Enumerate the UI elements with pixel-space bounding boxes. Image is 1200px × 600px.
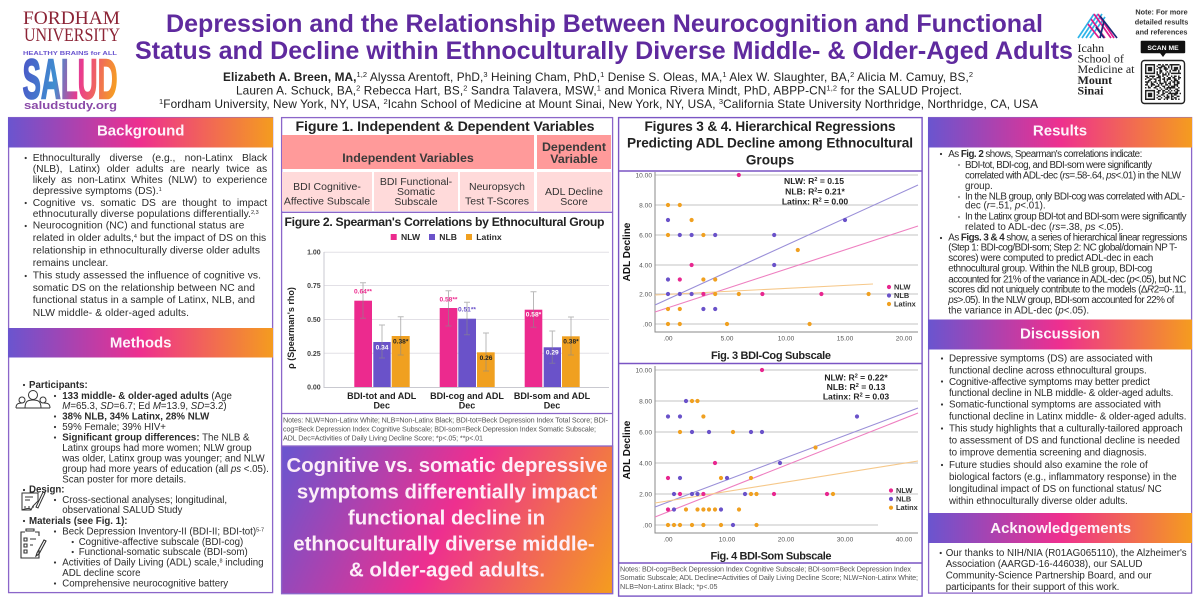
- authors and affiliations: 2: [383, 97, 388, 106]
- text block: background: somatic DS on the relationship between NC and: [33, 283, 255, 294]
- authors and affiliations: 1,2: [826, 84, 837, 92]
- authors and affiliations: California State University Northridge, Northridge, CA, USA: [723, 97, 1038, 111]
- authors and affiliations: 1,2: [356, 70, 367, 79]
- text block: background: relationship in ethnoculturally diverse older adults: [33, 246, 260, 256]
- figure 1: variables table: Affective Subscale: [284, 196, 370, 208]
- callout: key finding: functional decline in: [348, 508, 545, 530]
- annotation: R squared figure 3: 2: [814, 188, 817, 194]
- authors and affiliations: Elizabeth A. Breen, MA,: [223, 70, 356, 84]
- text block: discussion: Cognitive-affective symptoms may better predict: [949, 377, 1150, 388]
- text block: materials: Beck Depression Inventory-II (BDI-II; BDI-tot): [62, 526, 256, 538]
- text block: acknowledgements: Association (AARGD-16-446038), our SALUD: [946, 559, 1142, 570]
- annotation: R squared figure 3: 2: [819, 198, 822, 204]
- notes: figures 3 and 4: NLB=Non-Latinx Black; *p<.05: [620, 582, 718, 591]
- figure 1: variables table: Somatic: [397, 186, 435, 198]
- chart: figure 4 scatter plot: 2.00: [639, 492, 652, 498]
- authors and affiliations: 1: [159, 97, 163, 106]
- heading: methods: [8, 328, 273, 358]
- text block: results: related to ADL-dec (rs=.38, ps <.05).: [965, 222, 1124, 233]
- figure 2: bar chart: 0.25: [307, 351, 321, 358]
- text block: participants: Latinx groups had more women; NLW group: [62, 443, 252, 454]
- chart: figure 3 scatter plot: 5.00: [721, 336, 734, 342]
- text block: results: As Fig. 2 shows, Spearman's correlations indicate:: [948, 149, 1142, 160]
- chart: figure 3 scatter plot: 10.00: [635, 172, 652, 180]
- text block: results: accounted for 21% of the variance in ADL-dec (p<.05), but NC: [948, 274, 1186, 285]
- text block: acknowledgements: Our thanks to NIH/NIA (R01AG065110), the Alzheimer's: [946, 548, 1187, 559]
- chart: figure 3 scatter plot: 15.00: [837, 336, 854, 342]
- figure 1: variables table: BDI Functional-: [380, 176, 453, 188]
- authors and affiliations: 1: [600, 70, 604, 79]
- text block: materials: including: [223, 558, 264, 568]
- chart: figure 4 scatter plot: 10.00: [719, 536, 736, 544]
- chart: figure 4 scatter plot: 10.00: [635, 368, 652, 374]
- text: SALUD: [22, 48, 118, 112]
- text block: background: likely as non-Latinx Whites (NLW) to experience: [33, 175, 267, 186]
- figure 2: bar chart: [284, 215, 609, 410]
- text block: background: [26, 153, 268, 319]
- text block: discussion: functional decline in Latinx middle- & older-aged adults.: [949, 412, 1186, 422]
- text block: results: group.: [965, 181, 993, 192]
- logo: Icahn School of Medicine at Mount Sinai: Icahn: [1078, 41, 1104, 55]
- text block: acknowledgements: Community-Science Partnership Board, and our: [946, 570, 1152, 582]
- text block: participants: Participants:: [29, 380, 88, 391]
- notes: figures 3 and 4: [620, 564, 918, 591]
- text block: background: Cognitive vs. somatic DS are thought to impact: [33, 198, 267, 209]
- authors and affiliations: for the SALUD Project.: [837, 84, 962, 98]
- figure 1: variables table: BDI Cognitive-: [293, 181, 361, 193]
- chart: figure 3 scatter plot: 8.00: [639, 202, 652, 210]
- chart: figure 3 scatter plot: 4.00: [639, 262, 652, 270]
- chart: figure 4 scatter plot: .00: [663, 536, 673, 544]
- callout: key finding: [282, 446, 613, 594]
- chart: figure 4 scatter plot: 6.00: [639, 430, 652, 436]
- logo: Icahn School of Medicine at Mount Sinai: Sinai: [1078, 84, 1104, 98]
- heading: figures 3 and 4: [627, 119, 913, 168]
- figure 2: bar chart: 0.58**: [440, 296, 458, 304]
- figure 2: bar chart: 0.34: [376, 344, 389, 352]
- text block: discussion: Somatic-functional symptoms are associated with: [949, 400, 1161, 410]
- chart: figure 3 scatter plot: ADL Decline: [622, 222, 633, 281]
- text block: background: depressive symptoms (DS).: [33, 186, 159, 197]
- text block: background: Neurocognition (NC) and functional status are: [33, 220, 245, 232]
- heading: results: Results: [1033, 122, 1087, 140]
- figure 1: variables table: Variable: [550, 152, 598, 166]
- figure 1: variables table: Neuropsych: [469, 181, 525, 193]
- legend: figure 3: NLB: [894, 291, 909, 300]
- authors and affiliations: and Monica Rivera Mindt, PhD, ABPP-CN: [601, 84, 826, 98]
- panel: figures 3 and 4: [619, 118, 922, 596]
- chart: figure 3 scatter plot: .00: [663, 336, 673, 342]
- heading: acknowledgements: [928, 513, 1192, 543]
- text block: results: the variance in ADL-dec (p<.05).: [948, 305, 1089, 316]
- heading: figures 3 and 4: Predicting ADL Decline among Ethnocultural: [627, 136, 913, 150]
- figure 2: bar chart: Dec: [544, 400, 560, 410]
- annotation: R squared figure 3: = 0.15: [817, 176, 844, 186]
- text block: background: 1: [159, 187, 162, 193]
- chart: figure 4 scatter plot: Fig. 4 BDI-Som Subscale: [710, 550, 832, 562]
- text block: materials: Comprehensive neurocognitive battery: [62, 578, 228, 590]
- text block: participants: M=65.3, SD=6.7; Ed M=13.9, SD=3.2): [62, 401, 227, 412]
- logo: SALUD: saludstudy.org: [24, 100, 117, 112]
- text block: results: In the Latinx group BDI-tot and BDI-som were significantly: [965, 212, 1187, 223]
- notes: figure 2: Notes: NLW=Non-Latinx White; NLB=Non-Latinx Black; BDI-tot=Beck Depression Index Total Score; BDI-: [283, 416, 609, 424]
- text block: participants: Scan poster for more details.: [62, 474, 186, 486]
- chart: figure 4 scatter plot: [622, 366, 919, 562]
- authors and affiliations: Heining Cham, PhD,: [488, 70, 600, 84]
- chart: figure 3 scatter plot: 10.00: [778, 336, 795, 342]
- text block: materials: Cognitive-affective subscale (BDI-cog): [79, 537, 243, 548]
- authors and affiliations: Alex W. Slaughter, BA,: [727, 70, 850, 84]
- text block: background: 2,3: [251, 210, 259, 216]
- annotation: R squared figure 4: 2: [855, 374, 858, 380]
- panel: results, discussion, acknowledgements: [928, 118, 1192, 593]
- notes: figure 2: [283, 416, 609, 442]
- text block: results: As Figs. 3 & 4 show, a series of hierarchical linear regressions: [948, 233, 1187, 244]
- heading: methods: Methods: [110, 334, 172, 352]
- figure 2: bar chart: BDI-cog and ADL: [430, 391, 504, 401]
- chart: figure 4 scatter plot: 8.00: [639, 398, 652, 406]
- text block: background: remains unclear.: [33, 258, 108, 269]
- text block: discussion: within ethnoculturally diverse older adults.: [948, 496, 1128, 507]
- text block: materials: 8: [220, 558, 223, 564]
- logo: Icahn School of Medicine at Mount Sinai: [1078, 14, 1135, 98]
- figure 2: bar chart: BDI-som and ADL: [514, 391, 591, 401]
- logo: Fordham University: FORDHAM: [23, 8, 120, 29]
- text block: discussion: [942, 354, 1186, 507]
- text block: participants: 59% Female; 39% HIV+: [62, 422, 166, 433]
- callout: key finding: & older-aged adults.: [349, 560, 545, 582]
- callout: key finding: ethnoculturally diverse middle-: [293, 534, 595, 556]
- figure 2: bar chart: 0.50: [307, 317, 321, 324]
- annotation: R squared figure 3: 2: [814, 177, 817, 183]
- chart legend: [391, 232, 502, 242]
- text block: results: ps>.05). In the NLW group, BDI-som accounted for 22% of: [947, 295, 1175, 306]
- annotation: R squared figure 4: Latinx: R: [823, 392, 860, 402]
- authors and affiliations: Rebecca Hart, BS,: [360, 84, 463, 98]
- text block: discussion: to improve dementia screening and diagnosis.: [949, 448, 1147, 458]
- authors and affiliations: 2: [850, 70, 854, 79]
- figure 2: bar chart: 0.64**: [354, 288, 372, 296]
- chart: figure 4 scatter plot: 40.00: [896, 536, 913, 544]
- authors and affiliations: 1: [722, 70, 727, 79]
- annotation: R squared figure 3: NLW: R: [784, 176, 814, 186]
- text block: results: scores did not uniquely contribute to the models (ΔR2=0-.11,: [948, 285, 1186, 296]
- figure 2: bar chart: 0.38*: [393, 338, 409, 346]
- logo: Fordham University: [23, 8, 120, 46]
- chart: figure 4 scatter plot: 20.00: [778, 536, 795, 544]
- text block: design: Cross-sectional analyses; longitudinal,: [62, 495, 227, 506]
- text block: results: BDI-tot, BDI-cog, and BDI-som were significantly: [965, 160, 1152, 171]
- logo: Icahn School of Medicine at Mount Sinai: School of: [1078, 52, 1124, 66]
- annotation: R squared figure 4: NLW: R: [824, 372, 855, 382]
- notes: figures 3 and 4: Notes: BDI-cog=Beck Depression Index Cognitive Subscale; BDI-som=Beck Depression Index: [620, 564, 911, 574]
- figure 1: variables table: Score: [560, 196, 588, 208]
- text block: participants: 133 middle- & older-aged adults (Age: [62, 391, 232, 402]
- chart: figure 3 scatter plot: [622, 172, 918, 362]
- authors and affiliations: Lauren A. Schuck, BA,: [236, 84, 356, 98]
- figure 1: variables table: Independent Variables: [342, 151, 474, 165]
- chart: figure 3 scatter plot: .00: [643, 322, 652, 328]
- text block: background: ethnocuturally diverse populations differentially.: [33, 209, 251, 220]
- heading: figures 3 and 4: Groups: [746, 152, 794, 168]
- title: [135, 10, 1073, 65]
- notes: figures 3 and 4: Somatic Subscale; ADL Decline=Activities of Daily Living Decline Score; NLW=Non-Latinx White;: [620, 573, 918, 582]
- text block: materials: ADL decline score: [62, 568, 141, 579]
- text block: results: dec (r=.51, p<.01).: [965, 201, 1046, 212]
- logo: SALUD: HEALTHY BRAINS for ALL: [23, 51, 118, 57]
- chart: figure 4 scatter plot: .00: [643, 522, 652, 530]
- logo: Icahn School of Medicine at Mount Sinai: Mount: [1078, 73, 1112, 87]
- text block: discussion: biological factors (e.g., inflammatory response) in the: [949, 472, 1177, 483]
- logo: Icahn School of Medicine at Mount Sinai: Medicine at: [1078, 62, 1135, 76]
- figure 2: bar chart: 0.29: [546, 350, 559, 356]
- notes: figure 2: ADL Dec=Activities of Daily Living Decline Score; *p<.05; **p<.01: [283, 434, 483, 442]
- text block: results: ethnocultural group. Within the NLB group, BDI-cog: [948, 264, 1152, 275]
- icon: people: [16, 390, 50, 408]
- heading: figures 3 and 4: Figures 3 & 4. Hierarchical Regressions: [644, 119, 896, 134]
- annotation: R squared figure 4: 2: [856, 383, 859, 389]
- text block: results: scores) were computed to predict ADL-dec in each: [948, 253, 1153, 264]
- text block: acknowledgements: [941, 548, 1187, 593]
- text block: acknowledgements: participants for their support of this work.: [946, 582, 1119, 593]
- heading: background: [8, 118, 273, 148]
- chart: figure 3 scatter plot: 20.00: [896, 336, 913, 342]
- text block: discussion: This study highlights that a culturally-tailored approach: [949, 424, 1183, 434]
- figure 2: bar chart: 0.26: [480, 355, 493, 362]
- chart: figure 4 scatter plot: 4.00: [639, 460, 652, 468]
- title: Status and Decline within Ethnoculturally Diverse Middle- & Older-Aged Adults: [135, 37, 1073, 65]
- text block: background: related in older adults,: [33, 233, 134, 244]
- authors and affiliations: 3: [483, 70, 488, 79]
- text block: materials: Functional-somatic subscale (BDI-som): [79, 547, 248, 558]
- figure 1: variables table: ADL Decline: [545, 186, 603, 198]
- legend: figure 4: Latinx: [896, 503, 919, 512]
- figure 1: variables table: [282, 119, 611, 211]
- legend: figure 3: [889, 282, 917, 308]
- scan me QR code: [1141, 41, 1185, 104]
- text block: background: functional status in a sample of Latinx, NLB, and: [33, 295, 255, 306]
- figure 2: bar chart: Figure 2. Spearman's Correlations by Ethnocultural Group: [284, 215, 604, 229]
- note: more results: detailed results: [1135, 18, 1188, 26]
- annotation: R squared figure 4: = 0.22*: [858, 372, 888, 382]
- text block: participants: Significant group differences: The NLB &: [62, 432, 250, 444]
- text block: results: In the NLB group, only BDI-cog was correlated with ADL-: [965, 192, 1185, 203]
- figure 1: variables table: Test T-Scores: [465, 196, 529, 208]
- text block: background: This study assessed the influence of cognitive vs.: [33, 270, 261, 282]
- heading: discussion: [928, 320, 1192, 350]
- panel: background and methods: [8, 118, 273, 593]
- text block: discussion: Future studies should also examine the role of: [949, 460, 1148, 471]
- heading: results: [928, 118, 1192, 148]
- figure 2: bar chart: 0.38*: [563, 338, 579, 346]
- title: Depression and the Relationship Between Neurocognition and Functional: [166, 10, 1043, 38]
- authors and affiliations: Denise S. Oleas, MA,: [604, 70, 722, 84]
- heading: discussion: Discussion: [1020, 326, 1100, 342]
- authors and affiliations: 2: [969, 70, 973, 79]
- text block: background: Ethnoculturally diverse (e.g., non-Latinx Black: [33, 153, 268, 164]
- logo: SALUD: [22, 48, 118, 112]
- authors and affiliations: Fordham University, New York, NY, USA,: [163, 97, 383, 111]
- authors and affiliations: Sandra Talavera, MSW,: [468, 84, 597, 98]
- chart: figure 3 scatter plot: 6.00: [639, 232, 652, 240]
- authors and affiliations: 2: [356, 84, 360, 92]
- text block: participants: [24, 380, 269, 486]
- text block: discussion: functional decline across ethnocultural groups.: [949, 366, 1147, 376]
- callout: key finding: Cognitive vs. somatic depressive: [286, 455, 608, 477]
- figure 2: bar chart: 0.58*: [526, 312, 542, 318]
- chart legend: Latinx: [476, 232, 502, 242]
- authors and affiliations: 3: [719, 97, 723, 106]
- text block: background: NLW middle- & older-aged adults.: [33, 308, 189, 319]
- text block: participants: 38% NLB, 34% Latinx, 28% NLW: [62, 412, 210, 422]
- legend: figure 3: Latinx: [894, 300, 917, 308]
- text block: materials: [24, 516, 264, 590]
- legend: figure 3: NLW: [894, 282, 910, 292]
- annotation: R squared figure 3: = 0.21*: [817, 186, 845, 196]
- text block: discussion: Depressive symptoms (DS) are associated with: [949, 354, 1153, 364]
- figure 1: variables table: Dependent: [542, 140, 606, 154]
- chart: figure 4 scatter plot: ADL Decline: [622, 420, 633, 479]
- text block: participants: group had more years of education (all ps <.05).: [62, 464, 269, 475]
- annotation: R squared figure 4: [823, 372, 889, 402]
- figure 2: bar chart: BDI-tot and ADL: [347, 391, 417, 401]
- annotation: R squared figure 4: NLB: R: [827, 382, 856, 392]
- logo: Fordham University: UNIVERSITY: [24, 25, 120, 46]
- text block: background: 4: [134, 234, 137, 240]
- figure 1: variables table: Figure 1. Independent & Dependent Variables: [296, 119, 595, 135]
- text block: design: Design:: [29, 484, 65, 496]
- note: more results: [1135, 8, 1188, 36]
- text block: results: (Step 1: BDI-cog/BDI-som; Step 2: NC global/domain NP T-: [948, 243, 1177, 254]
- figure 2: bar chart: 0.51**: [458, 306, 476, 314]
- text block: discussion: to assessment of DS and functional decline is needed: [949, 436, 1180, 446]
- text block: materials: Activities of Daily Living (ADL) scale,: [62, 558, 220, 568]
- chart: figure 3 scatter plot: Fig. 3 BDI-Cog Subscale: [711, 350, 831, 362]
- text block: design: [24, 484, 227, 516]
- authors and affiliations: 1: [597, 84, 601, 92]
- annotation: R squared figure 4: = 0.03: [863, 392, 889, 402]
- text block: results: correlated with ADL-dec (rs=.58-.64, ps<.01) in the NLW: [965, 171, 1182, 182]
- figure 2: bar chart: 0.75: [307, 283, 321, 290]
- icon: design blueprint: [22, 492, 45, 510]
- legend: figure 4: [891, 486, 919, 512]
- chart: figure 3 scatter plot: 2.00: [639, 292, 652, 298]
- text block: discussion: longitudinal impact of DS on functional status/ NC: [949, 484, 1162, 495]
- authors and affiliations: Icahn School of Medicine at Mount Sinai, New York, NY, USA,: [388, 97, 719, 111]
- authors and affiliations: Alyssa Arentoft, PhD,: [367, 70, 483, 84]
- text block: results: [941, 149, 1187, 316]
- text block: participants: was older, Latinx group was younger; and NLW: [61, 454, 265, 464]
- annotation: R squared figure 3: NLB: R: [785, 186, 814, 196]
- figure 2: bar chart: ρ (Spearman's rho): [286, 287, 296, 369]
- chart legend: NLB: [439, 232, 457, 242]
- text block: design: observational SALUD Study: [62, 505, 183, 516]
- figure 2: bar chart: Dec: [459, 400, 475, 410]
- heading: background: Background: [97, 122, 184, 140]
- heading: acknowledgements: Acknowledgements: [990, 520, 1131, 537]
- annotation: R squared figure 3: = 0.00: [822, 196, 848, 206]
- annotation: R squared figure 4: 2: [860, 392, 863, 398]
- text block: discussion: functional decline in NLB middle- & older-aged adults.: [949, 388, 1173, 399]
- panel: figures 1 and 2: [282, 118, 613, 594]
- icon: clipboard: [21, 529, 46, 558]
- figure 2: bar chart: 0.00: [307, 384, 321, 392]
- legend: figure 4: NLW: [896, 486, 912, 495]
- notes: figure 2: cog=Beck Depression Index Cognitive Subscale; BDI-som=Beck Depression Index Somatic Subscale;: [283, 424, 596, 434]
- annotation: R squared figure 3: Latinx: R: [782, 196, 819, 206]
- figure 2: bar chart: Dec: [373, 400, 390, 410]
- callout: key finding: symptoms differentially impact: [297, 482, 597, 504]
- chart: figure 4 scatter plot: 30.00: [837, 536, 854, 544]
- text block: background: (NLB), Latinx) older adults are nearly twice as: [33, 164, 267, 175]
- legend: figure 4: NLB: [896, 494, 911, 504]
- annotation: R squared figure 4: = 0.13: [859, 382, 886, 392]
- figure 2: bar chart: 1.00: [307, 250, 321, 256]
- chart legend: NLW: [401, 232, 421, 242]
- note: more results: Note: For more: [1135, 8, 1188, 16]
- text block: materials: 5-7: [256, 528, 264, 534]
- annotation: R squared figure 3: [782, 176, 848, 206]
- authors and affiliations: [159, 70, 1038, 111]
- text block: materials: Materials (see Fig. 1):: [29, 516, 128, 527]
- scan me QR code: SCAN ME: [1147, 45, 1179, 52]
- note: more results: and references: [1136, 28, 1187, 36]
- authors and affiliations: Alicia M. Camuy, BS,: [854, 70, 969, 84]
- authors and affiliations: 2: [463, 84, 467, 92]
- figure 1: variables table: Subscale: [394, 196, 438, 208]
- text block: background: but the impact of DS on this: [137, 233, 266, 244]
